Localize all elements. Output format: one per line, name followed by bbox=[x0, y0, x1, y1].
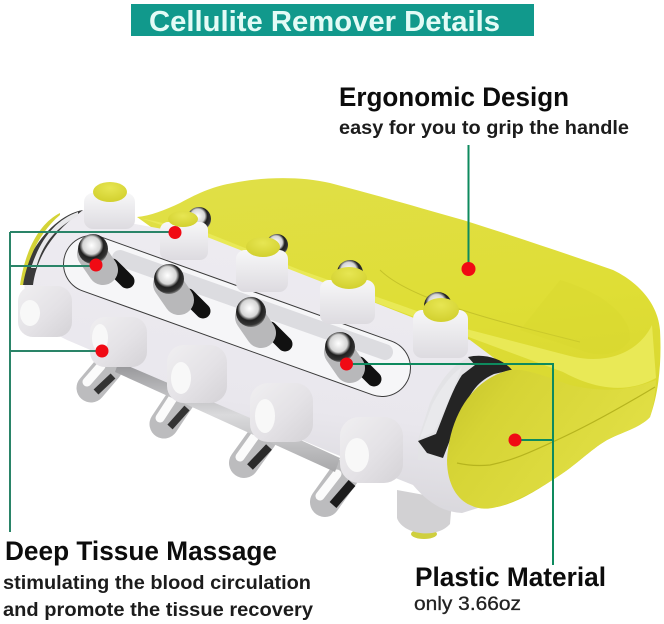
heading block: ergonomic design bbox=[339, 82, 629, 139]
callout line: ergonomic design bbox=[468, 145, 470, 270]
red marker dots bbox=[90, 226, 522, 446]
bottom stub with yellow foot bbox=[397, 490, 452, 539]
row of top knobs bbox=[84, 182, 468, 358]
chrome prongs under body bbox=[87, 366, 352, 505]
chrome rail under body bbox=[115, 358, 340, 472]
heading block: ergonomic design: easy for you to grip the handle bbox=[339, 117, 629, 139]
end cap seam bbox=[457, 387, 655, 466]
heading block: deep tissue massage: and promote the tissue recovery bbox=[3, 599, 313, 621]
callout lines: plastic material bbox=[346, 364, 553, 565]
heading block: deep tissue massage: Deep Tissue Massage bbox=[5, 536, 277, 566]
front knobs bbox=[18, 286, 403, 483]
chrome right ring bbox=[418, 356, 512, 460]
heading block: plastic material: only 3.66oz bbox=[414, 594, 521, 615]
heading block: plastic material bbox=[414, 562, 606, 615]
handle: yellow grip bbox=[137, 178, 661, 507]
chrome balls behind top knobs bbox=[187, 207, 452, 320]
product: massager roller bbox=[18, 178, 661, 539]
heading block: ergonomic design: Ergonomic Design bbox=[339, 82, 569, 112]
title banner: Cellulite Remover Details bbox=[149, 6, 500, 38]
heading block: deep tissue massage bbox=[3, 536, 313, 621]
chrome left ring bbox=[23, 210, 83, 285]
yellow end cap bbox=[447, 370, 656, 509]
chrome massage balls in slot bbox=[78, 234, 374, 379]
heading block: plastic material: Plastic Material bbox=[415, 562, 606, 592]
white cylinder body bbox=[24, 210, 510, 513]
callout lines: deep tissue massage bbox=[10, 232, 175, 532]
chrome slot bbox=[92, 258, 385, 368]
heading block: deep tissue massage: stimulating the blood circulation bbox=[3, 572, 311, 594]
